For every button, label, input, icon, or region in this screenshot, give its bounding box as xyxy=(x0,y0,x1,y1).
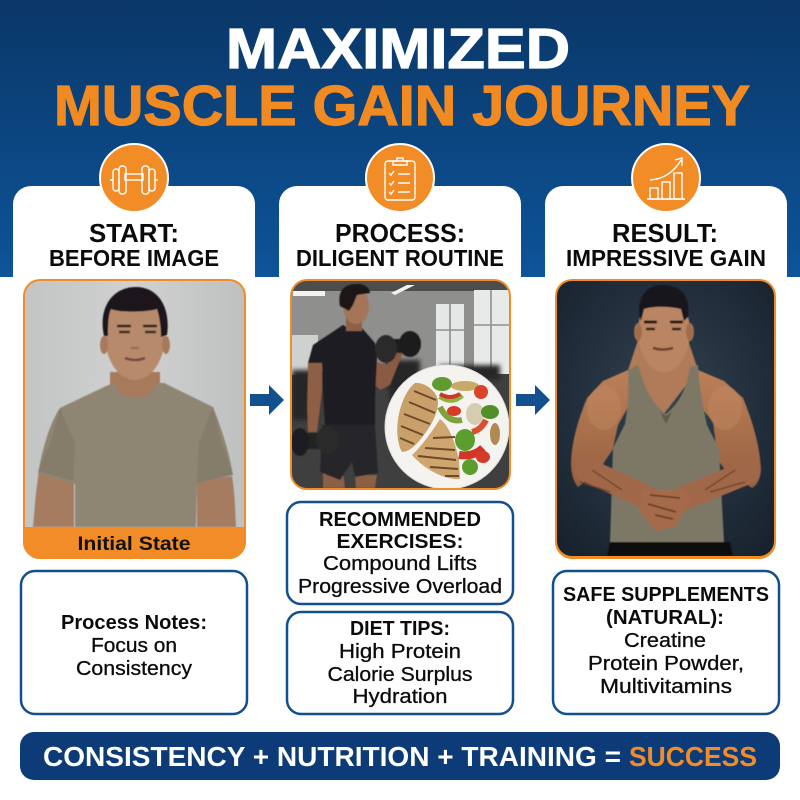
banner: success formula: CONSISTENCY + NUTRITION + TRAINING = xyxy=(43,741,621,772)
man with dumbbells xyxy=(291,284,421,488)
panel: diet tips: DIET TIPS: xyxy=(350,618,450,640)
panel: result xyxy=(545,144,787,296)
heading: start: BEFORE IMAGE xyxy=(49,245,219,271)
title xyxy=(54,17,750,138)
banner: success formula xyxy=(20,732,780,780)
panel: safe supplements: SAFE SUPPLEMENTS xyxy=(563,584,769,606)
header background band xyxy=(0,0,800,277)
icon: dumbbell xyxy=(100,144,168,212)
panel: recommended exercises: Compound Lifts xyxy=(323,553,477,575)
heading: result xyxy=(566,218,766,271)
forearms over the tank xyxy=(587,470,650,499)
panel: process notes xyxy=(21,571,247,714)
icon: growth chart xyxy=(632,144,700,212)
panel: process notes: Focus on xyxy=(91,635,177,657)
panel: diet tips: High Protein xyxy=(339,641,461,663)
caption: initial state: Initial State xyxy=(78,534,190,555)
arrow: process to result xyxy=(516,385,550,415)
heading: result: IMPRESSIVE GAIN xyxy=(566,245,766,271)
heading: process: PROCESS: xyxy=(335,218,465,248)
title: MAXIMIZED xyxy=(226,17,570,81)
heading: process: DILIGENT ROUTINE xyxy=(296,245,504,271)
panel: process xyxy=(279,144,521,296)
heading: process xyxy=(296,218,504,271)
photo: before image xyxy=(23,279,246,559)
panel: recommended exercises: Progressive Overload xyxy=(298,576,502,598)
photo: result physique xyxy=(555,279,776,559)
panel: recommended exercises xyxy=(287,502,513,604)
arrow: start to process xyxy=(250,385,284,415)
panel: safe supplements: Creatine xyxy=(624,630,706,652)
panel: diet tips: Hydration xyxy=(352,686,448,708)
panel: safe supplements: (NATURAL): xyxy=(606,607,724,629)
panel: start xyxy=(13,144,255,296)
panel: safe supplements xyxy=(553,571,779,714)
heading: start xyxy=(49,218,219,271)
heading: result: RESULT: xyxy=(612,218,718,248)
caption: initial state xyxy=(23,527,246,559)
panel: safe supplements: Multivitamins xyxy=(600,676,732,698)
panel: process notes: Process Notes: xyxy=(61,612,207,634)
icon: clipboard checklist xyxy=(366,144,434,212)
heading: start: START: xyxy=(89,218,179,248)
photo: process routine xyxy=(290,279,511,490)
plate of chicken and vegetables xyxy=(385,365,509,489)
panel: safe supplements: Protein Powder, xyxy=(588,653,744,675)
panel: diet tips xyxy=(287,612,513,714)
panel: diet tips: Calorie Surplus xyxy=(328,664,472,686)
panel: recommended exercises: EXERCISES: xyxy=(336,531,464,553)
panel: recommended exercises: RECOMMENDED xyxy=(319,509,481,531)
banner: success formula: SUCCESS xyxy=(629,741,757,772)
title: MUSCLE GAIN JOURNEY xyxy=(54,74,750,138)
panel: process notes: Consistency xyxy=(76,658,192,680)
